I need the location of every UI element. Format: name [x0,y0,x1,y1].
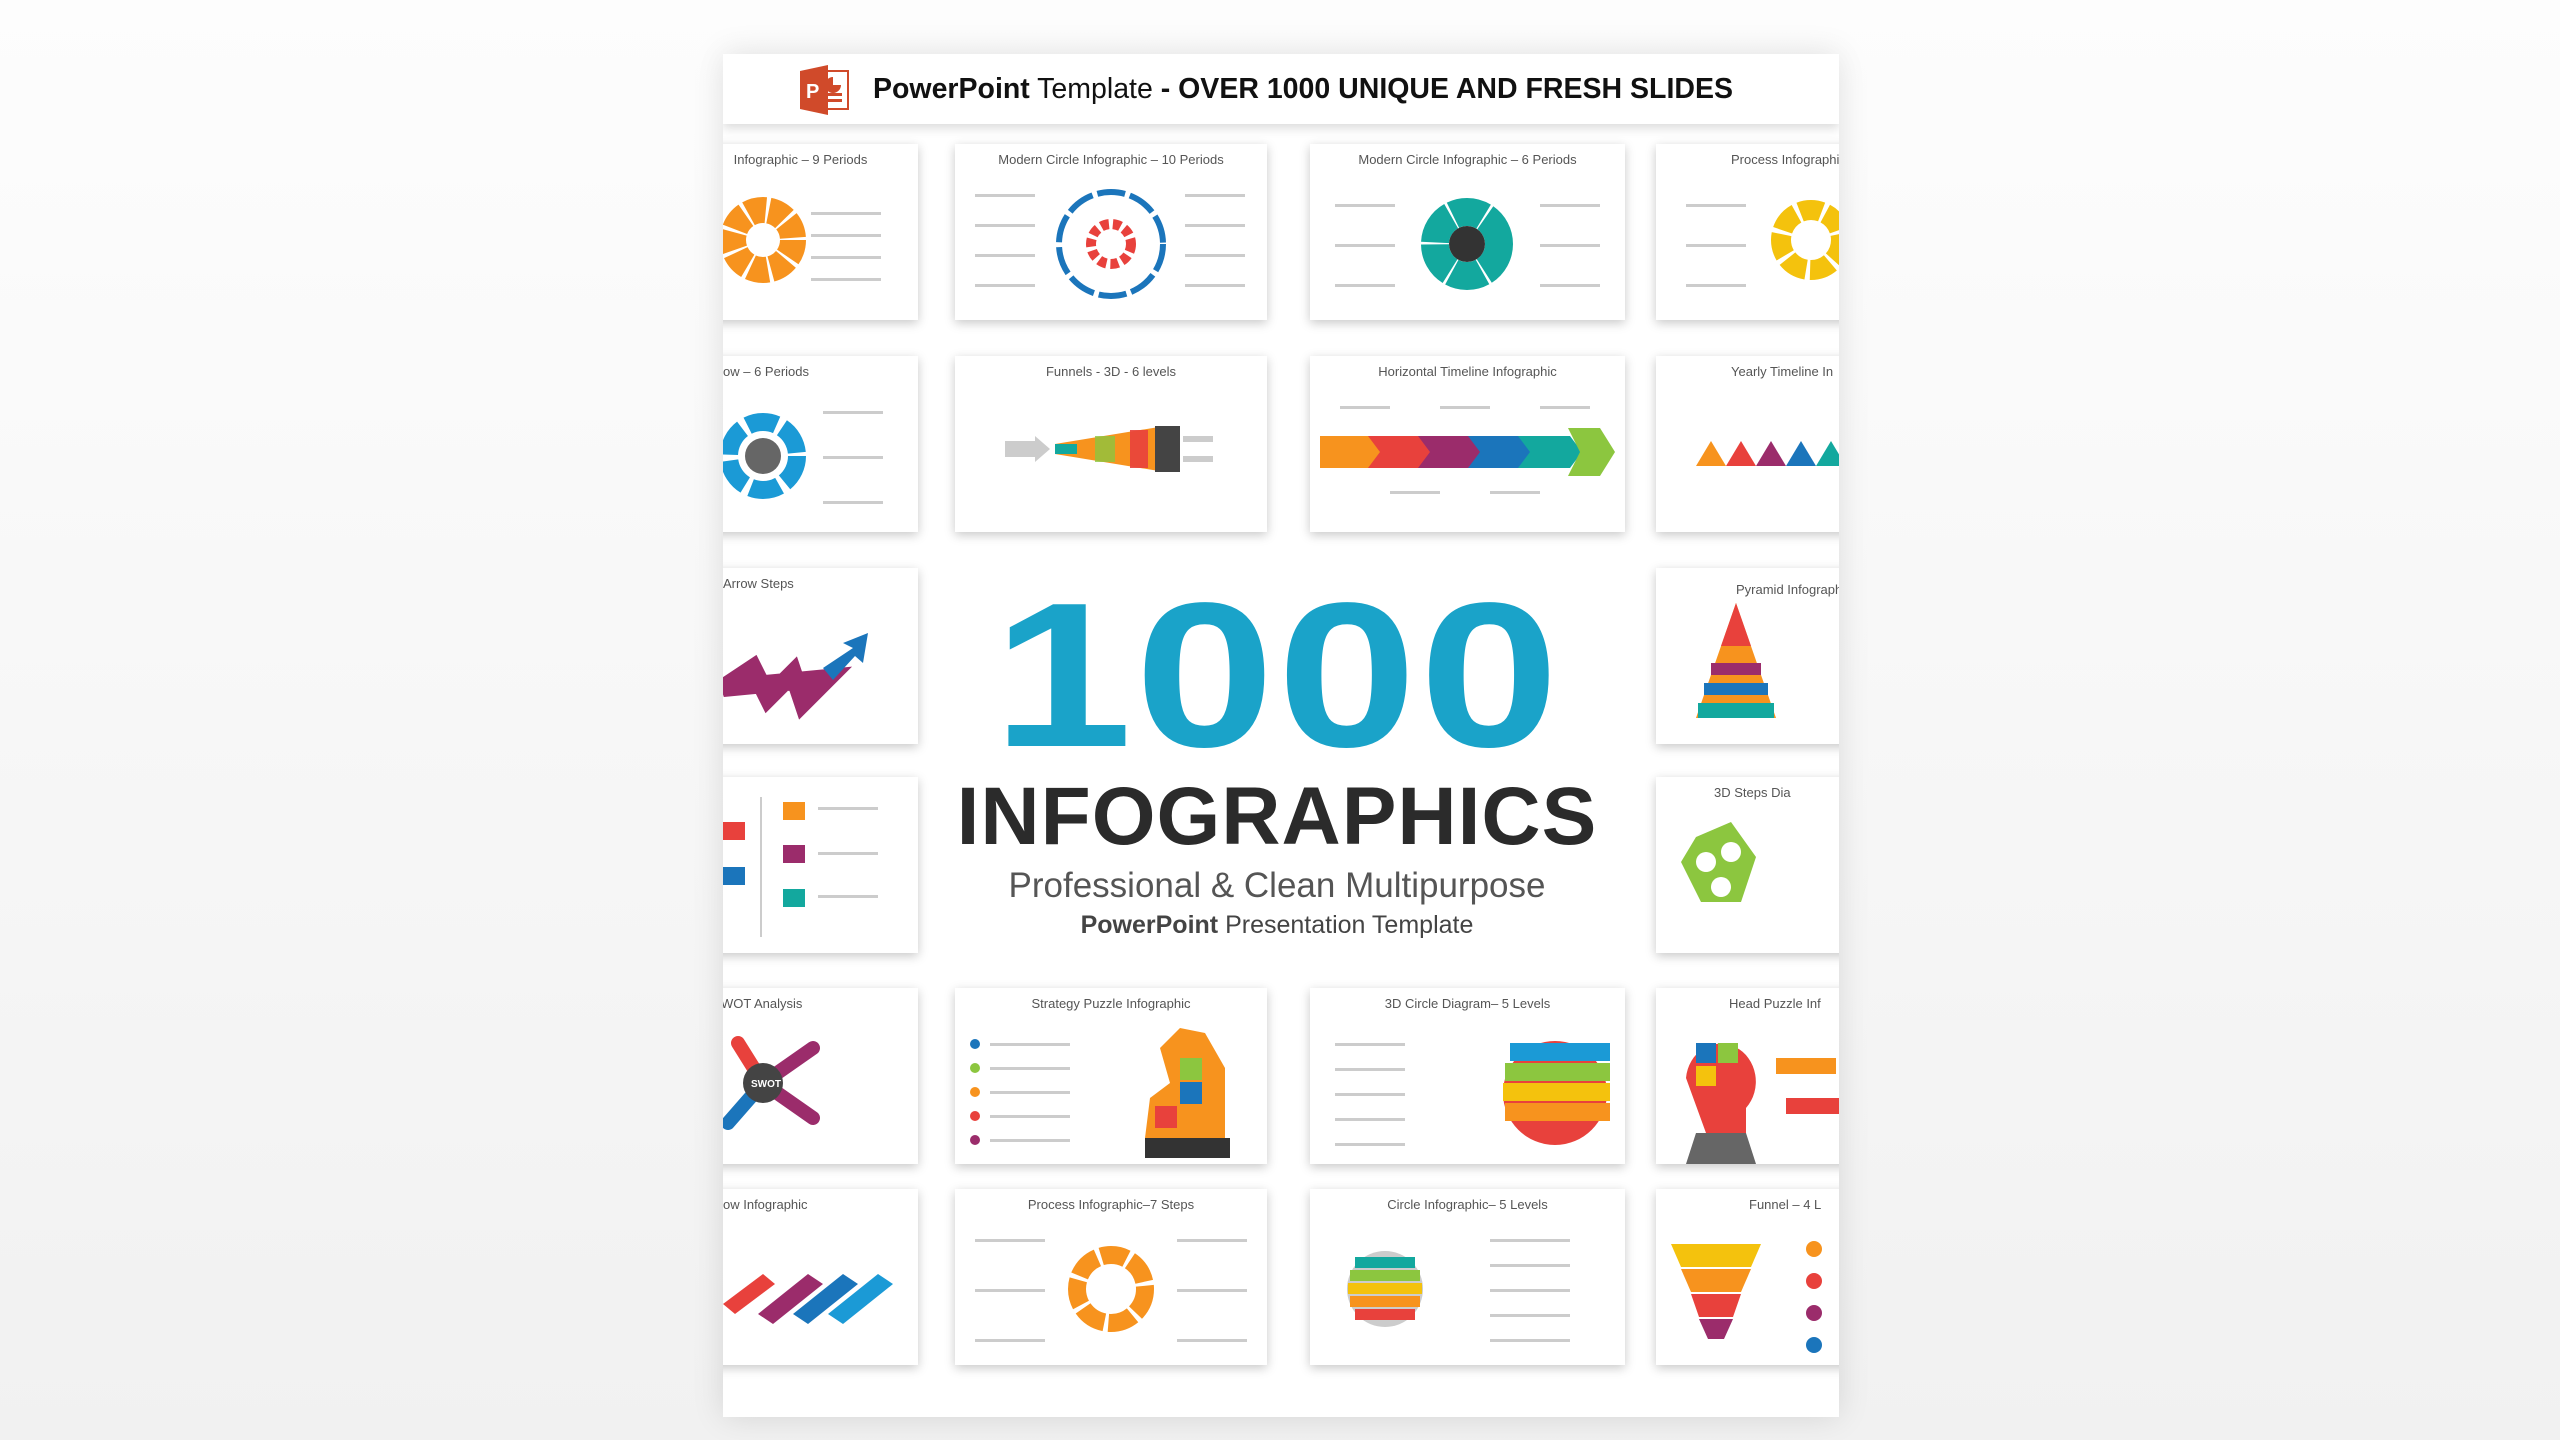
tile: strategy puzzle: Strategy Puzzle Infographic [1032,996,1190,1011]
tile: funnels 3D [955,356,1267,532]
tile: circle 5 levels: Circle Infographic– 5 Levels [1387,1197,1548,1212]
tile: 6 periods: ow – 6 Periods [723,364,809,379]
tile: SWOT [683,988,918,1164]
heading: INFOGRAPHICS: INFOGRAPHICS [957,771,1597,862]
tile: modern circle 6 periods: Modern Circle Infographic – 6 Periods [1358,152,1577,167]
tile: horizontal timeline [1310,356,1625,532]
icon: powerpoint logo: P [806,81,819,103]
subtitle 2: PowerPoint Presentation Template [1081,911,1473,939]
tile: circle 5 levels [1310,1189,1625,1365]
tile: head puzzle [1656,988,1876,1164]
tile: 3D circle diagram [1310,988,1625,1164]
tile: modern circle 10 periods: Modern Circle Infographic – 10 Periods [998,152,1224,167]
tile: process 7 steps [955,1189,1267,1365]
header bar [723,54,1839,124]
poster [723,54,1839,1417]
tile: 9 periods [683,144,918,320]
tile: head puzzle: Head Puzzle Inf [1729,996,1821,1011]
tile: modern circle 10 periods [955,144,1267,320]
subtitle: Professional & Clean Multipurpose [1009,866,1545,905]
tile: arrow steps [683,568,918,744]
tile: 3D circle diagram: 3D Circle Diagram– 5 Levels [1385,996,1550,1011]
tile: arrow steps: Arrow Steps [723,576,794,591]
tile: horizontal timeline: Horizontal Timeline Infographic [1378,364,1557,379]
tile: timeline list [683,777,918,953]
tile: funnel 4 levels: Funnel – 4 L [1749,1197,1821,1212]
tile: 3D steps: 3D Steps Dia [1714,785,1791,800]
tile: strategy puzzle [955,988,1267,1164]
tile: SWOT: WOT Analysis [723,996,802,1011]
header text: PowerPoint Template - OVER 1000 UNIQUE AND FRESH SLIDES [873,73,1733,105]
tile: yearly timeline [1656,356,1876,532]
tile: modern circle 6 periods [1310,144,1625,320]
tile: yearly timeline: Yearly Timeline In [1731,364,1833,379]
tile: arrow infographic: ow Infographic [723,1197,808,1212]
tile: 3D steps [1656,777,1876,953]
tile: 9 periods: Infographic – 9 Periods [734,152,867,167]
heading: 1000: 1000 [993,560,1561,790]
tile: SWOT: SWOT [751,1079,781,1090]
tile: arrow infographic [683,1189,918,1365]
tile: process 7 steps: Process Infographic–7 Steps [1028,1197,1194,1212]
icon: powerpoint logo [800,65,849,115]
tile: pyramid [1656,568,1876,744]
tile: process infographic [1656,144,1876,320]
tile: funnel 4 levels [1656,1189,1876,1365]
tile: funnels 3D: Funnels - 3D - 6 levels [1046,364,1176,379]
tile: 6 periods [683,356,918,532]
